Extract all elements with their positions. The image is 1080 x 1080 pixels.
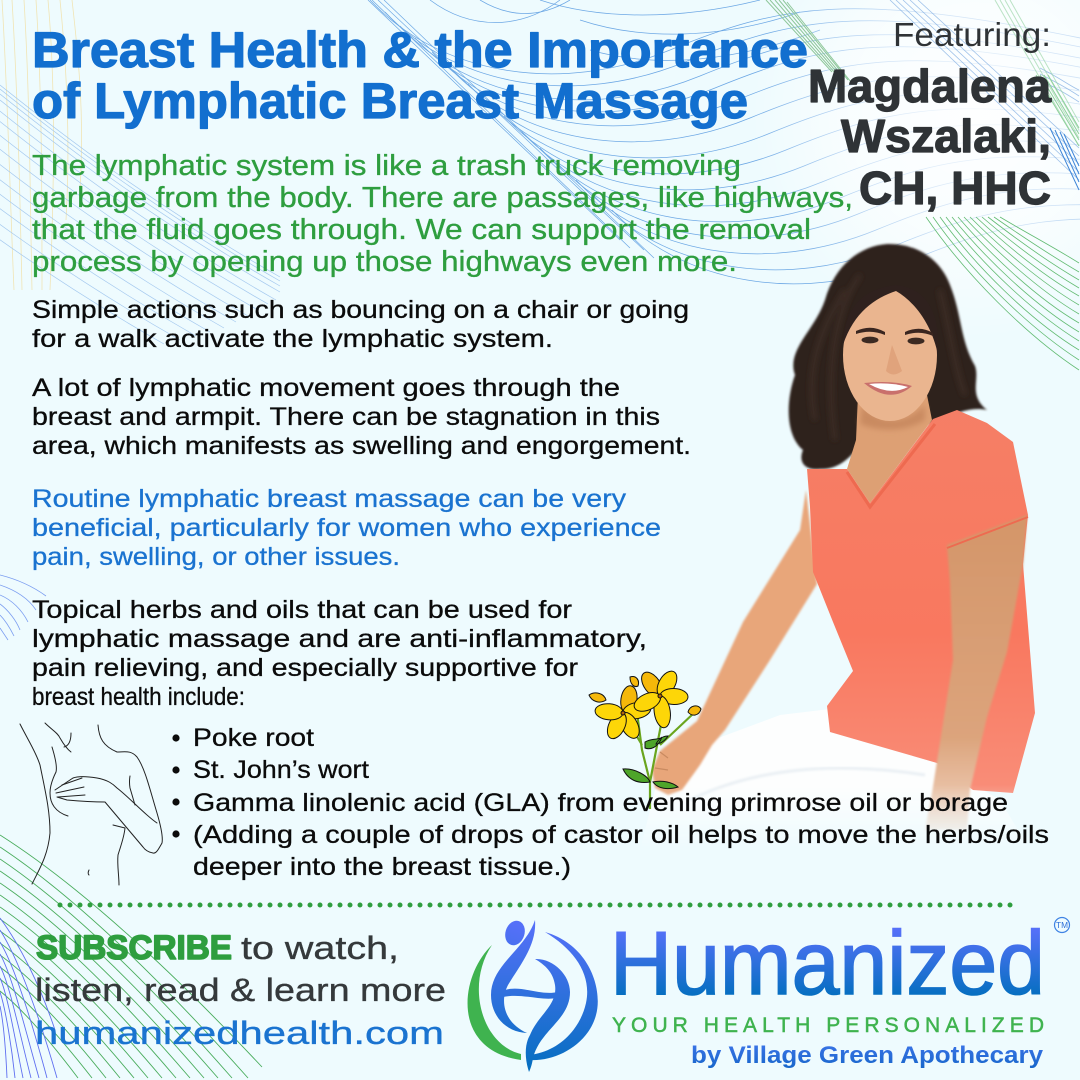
face — [843, 285, 938, 421]
paragraph: routine massage callout — [32, 485, 661, 571]
subscribe call to action — [35, 929, 446, 1051]
paragraph: stagnation: breast and armpit. There can be stagnation in this — [32, 403, 660, 431]
flower right — [631, 668, 688, 729]
subscribe call to action: to watch, — [241, 930, 399, 966]
intro paragraph: garbage from the body. There are passages, like highways, — [32, 182, 853, 214]
paragraph: topical herbs: Topical herbs and oils that can be used for — [32, 596, 572, 624]
subscribe call to action: SUBSCRIBE — [36, 929, 232, 967]
paragraph: simple actions: for a walk activate the lymphatic system. — [32, 325, 553, 353]
icon: breast line drawing — [20, 723, 162, 885]
photo: woman in coral shirt — [640, 244, 1035, 850]
trouser shading — [690, 768, 925, 800]
tagline: YOUR HEALTH PERSONALIZED — [612, 1014, 1044, 1037]
white trousers — [650, 710, 1008, 814]
paragraph: topical herbs — [32, 596, 647, 711]
coloured bands upper right — [766, 0, 1079, 370]
paragraph: routine massage callout: Routine lymphatic breast massage can be very — [32, 485, 627, 513]
sleeve seam — [947, 517, 1028, 548]
Humanized logo — [468, 914, 1070, 1072]
bullet dots — [172, 734, 180, 838]
hair highlights — [812, 275, 965, 440]
icon: St. John's wort flower — [589, 668, 701, 809]
trademark: TM — [1056, 921, 1068, 930]
coral shirt — [807, 410, 1035, 793]
neck shadow — [860, 405, 925, 430]
paragraph: topical herbs: pain relieving, and especially supportive for — [32, 654, 578, 682]
subscribe call to action: listen, read & learn more — [35, 972, 446, 1008]
intro paragraph: process by opening up those highways even more. — [32, 246, 737, 278]
intro paragraph: The lymphatic system is like a trash truck removing — [32, 150, 741, 182]
paragraph: routine massage callout: pain, swelling, or other issues. — [32, 543, 400, 571]
title: of Lymphatic Breast Massage — [32, 73, 748, 129]
paragraph: stagnation: A lot of lymphatic movement goes through the — [32, 374, 620, 402]
presenter name — [808, 60, 1051, 214]
trademark — [1054, 918, 1070, 932]
presenter name: Wszalaki, — [841, 110, 1051, 162]
title: Breast Health & the Importance — [32, 22, 808, 78]
bullet list: Poke root — [193, 724, 314, 752]
logo mark — [468, 918, 598, 1072]
presenter name: CH, HHC — [859, 162, 1051, 214]
featuring heading: Featuring: — [893, 16, 1051, 53]
bullet list: deeper into the breast tissue.) — [193, 853, 571, 881]
bullet list: St. John’s wort — [193, 756, 369, 784]
title — [32, 22, 808, 129]
lower left line waves — [0, 575, 262, 1078]
paragraph: simple actions — [32, 296, 689, 353]
presenter name: Magdalena — [808, 60, 1051, 112]
neck and chest — [847, 395, 932, 503]
bullet list: (Adding a couple of drops of castor oil helps to move the herbs/oils — [193, 821, 1049, 849]
paragraph: stagnation — [32, 374, 691, 460]
right arm — [925, 515, 1027, 830]
paragraph: routine massage callout: beneficial, particularly for women who experience — [32, 514, 661, 542]
paragraph: stagnation: area, which manifests as swelling and engorgement. — [32, 432, 691, 460]
neckline trim — [847, 424, 935, 507]
byline: by Village Green Apothecary — [691, 1042, 1044, 1069]
stems and leaves — [623, 690, 695, 809]
intro paragraph: that the fluid goes through. We can support the removal — [32, 214, 811, 246]
paragraph: topical herbs: breast health include: — [32, 683, 245, 711]
background line waves — [0, 0, 1080, 344]
intro paragraph — [32, 150, 853, 278]
white glow over the upper right waves — [680, 0, 1080, 400]
paragraph: simple actions: Simple actions such as bouncing on a chair or going — [32, 296, 689, 324]
hand fingers — [654, 752, 668, 782]
left arm — [652, 490, 817, 795]
dotted divider — [60, 902, 1013, 908]
bullet list: Gamma linolenic acid (GLA) from evening primrose oil or borage — [193, 789, 1008, 817]
paragraph: topical herbs: lymphatic massage and are anti-inflammatory, — [32, 625, 647, 653]
hair back — [789, 244, 987, 469]
buds — [589, 677, 701, 715]
wordmark: Humanized — [610, 914, 1045, 1014]
flower left — [594, 685, 652, 742]
subscribe call to action: humanizedhealth.com — [35, 1015, 444, 1051]
bullet list — [172, 724, 1049, 881]
